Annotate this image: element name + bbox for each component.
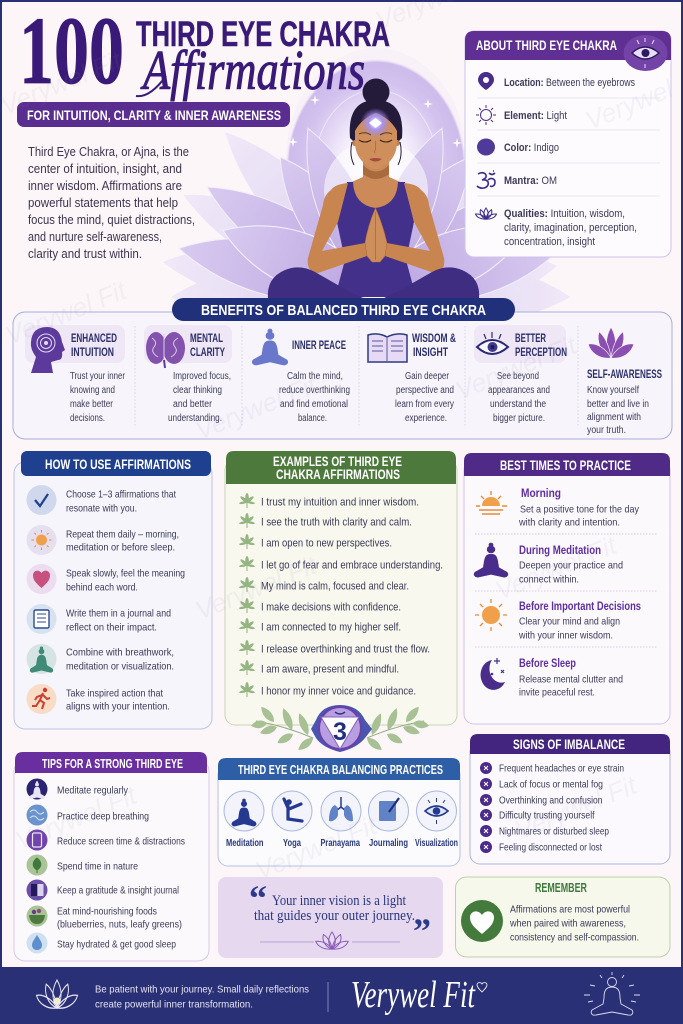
time: morning: Morning [521, 488, 561, 500]
footer message: Be patient with your journey. Small daily reflections [95, 984, 309, 996]
step: repeat: Repeat them daily – morning, [66, 528, 179, 540]
tip: hydration: Stay hydrated & get good sleep [57, 938, 176, 950]
benefit: enhanced intuition [25, 325, 126, 424]
practices header: THIRD EYE CHAKRA BALANCING PRACTICES [238, 763, 443, 777]
intro text: focus the mind, quiet distractions, [28, 213, 195, 227]
affirmation list [239, 493, 443, 698]
praying hands [365, 208, 387, 262]
panel: remember: REMEMBER [535, 881, 587, 895]
head and hair [350, 78, 402, 169]
best times header: BEST TIMES TO PRACTICE [500, 457, 631, 473]
how-to header: HOW TO USE AFFIRMATIONS [45, 456, 191, 472]
panel: balancing practices [218, 758, 460, 866]
tip: foods: (blueberries, nuts, leafy greens) [57, 918, 182, 930]
time: before sleep: Release mental clutter and [519, 674, 623, 686]
examples header [226, 451, 456, 484]
icon: footer lotus [36, 980, 78, 1008]
tip: breathing [26, 804, 149, 826]
affirmation list: I let go of fear and embrace understanding. [261, 560, 443, 572]
tip: foods: Eat mind-nourishing foods [57, 906, 157, 918]
intro text: powerful statements that help [28, 196, 178, 210]
signs list: Frequent headaches or eye strain [499, 762, 624, 774]
benefit: better perception: bigger picture. [493, 413, 545, 424]
time: before sleep: invite peaceful rest. [519, 686, 595, 698]
time: before sleep: Before Sleep [519, 658, 576, 670]
benefit: better perception: PERCEPTION [515, 347, 567, 359]
affirmation list: I see the truth with clarity and calm. [261, 516, 412, 528]
leaf wreath [250, 704, 430, 753]
benefit: enhanced intuition: knowing and [70, 385, 115, 396]
benefit: self-awareness: better and live in [587, 399, 649, 410]
benefit: wisdom and insight [368, 333, 456, 424]
tip: journal [26, 880, 179, 900]
benefit: mental clarity: and better [173, 399, 213, 410]
benefit: mental clarity: CLARITY [190, 347, 225, 359]
benefit: wisdom and insight: experience. [405, 413, 447, 424]
benefit: self-awareness: alignment with [587, 412, 641, 423]
watermarks: Verywel Fit [1, 274, 132, 351]
title: 100: 100 [19, 0, 124, 104]
benefit: enhanced intuition: ENHANCED [71, 333, 117, 345]
time: during meditation: During Meditation [519, 545, 601, 557]
time: morning [476, 488, 640, 528]
step: speak: Speak slowly, feel the meaning [66, 568, 185, 580]
practice: yoga: Yoga [283, 837, 301, 849]
practice: journaling: Journaling [369, 837, 408, 849]
tip: foods [26, 906, 182, 930]
signs header: SIGNS OF IMBALANCE [513, 737, 625, 752]
intro text [28, 145, 195, 261]
watermarks: Verywel Fit [451, 329, 582, 406]
subtitle ribbon [17, 102, 290, 127]
benefit: wisdom and insight: learn from every [395, 399, 454, 410]
about: color: Color: Indigo [504, 142, 559, 154]
step: choose: resonate with you. [66, 502, 137, 514]
footer [0, 967, 683, 1024]
title: Affirmations script: Affirmations [140, 40, 365, 102]
callout: quote: “ [249, 878, 267, 918]
affirmation list: My mind is calm, focused and clear. [261, 580, 409, 592]
intro text: center of intuition, insight, and [28, 162, 182, 176]
benefit: enhanced intuition: decisions. [70, 413, 105, 424]
time: before sleep [481, 658, 623, 698]
icon: footer meditator [584, 972, 640, 1015]
panel: remember: when paired with awareness, [509, 918, 626, 930]
time: during meditation: Deepen your practice and [519, 560, 623, 572]
watermarks: Verywel [581, 73, 678, 136]
benefit: inner peace [252, 329, 350, 424]
panel: best times to practice [464, 453, 670, 724]
benefit: better perception: BETTER [515, 333, 546, 345]
intro text: and nurture self-awareness, [28, 230, 162, 244]
icon: eye medallion [624, 35, 668, 71]
signs list: Feeling disconnected or lost [499, 842, 602, 854]
callout: quote: that guides your outer journey. [254, 908, 415, 924]
step: journal [26, 604, 171, 634]
intro text: Third Eye Chakra, or Ajna, is the [28, 145, 189, 159]
watermarks: Verywel Fit [251, 809, 382, 886]
step: combine: meditation or visualization. [66, 660, 174, 672]
benefit: wisdom and insight: perspective and [396, 385, 454, 396]
signs list: Overthinking and confusion [499, 794, 603, 806]
step: choose [26, 485, 176, 515]
woman figure [268, 78, 479, 299]
benefit: wisdom and insight: WISDOM & [412, 333, 456, 345]
title: Third Eye Chakra: THIRD EYE CHAKRA [136, 15, 390, 54]
time: before important decisions: with your inner wisdom. [518, 630, 613, 642]
watermarks: Verywel Fit [191, 549, 322, 626]
benefit: inner peace: reduce overthinking [279, 385, 350, 396]
examples header: CHAKRA AFFIRMATIONS [276, 467, 400, 482]
benefit: inner peace: and find emotional [280, 399, 348, 410]
panel: how to use affirmations [14, 451, 212, 729]
tip: reduce screen time [26, 830, 185, 850]
panel: remember: Affirmations are most powerful [510, 904, 630, 916]
examples header: EXAMPLES OF THIRD EYE [273, 454, 402, 469]
tip: meditate [26, 778, 129, 800]
about header: ABOUT THIRD EYE CHAKRA [476, 37, 617, 53]
about: mantra [477, 171, 557, 188]
benefit: self-awareness: Know yourself [587, 385, 639, 396]
icon: heart in circle [461, 900, 503, 942]
tip: nature: Spend time in nature [57, 860, 138, 872]
practice: pranayama [320, 791, 361, 849]
tips header [15, 752, 207, 773]
tips header: TIPS FOR A STRONG THIRD EYE [42, 756, 183, 771]
signs list: Lack of focus or mental fog [499, 778, 603, 790]
how-to header [21, 451, 211, 476]
watermarks: Verywel Fit [491, 529, 622, 606]
step: journal: Write them in a journal and [66, 608, 171, 620]
benefit: self-awareness [587, 327, 662, 436]
benefit: mental clarity: understanding. [168, 413, 222, 424]
callout: quote: ” [413, 911, 431, 951]
benefit: better perception: understand the [490, 399, 546, 410]
panel: signs of imbalance [470, 734, 670, 864]
about: location: Location: Between the eyebrows [504, 77, 635, 89]
panel: tips for a strong third eye [14, 752, 209, 961]
benefit: better perception [474, 325, 567, 424]
panel: remember [456, 877, 670, 957]
tip: breathing: Practice deep breathing [57, 810, 149, 822]
practice: yoga [272, 791, 312, 849]
practice: meditation: Meditation [226, 837, 264, 849]
time: during meditation: connect within. [519, 574, 579, 586]
benefit: wisdom and insight: INSIGHT [413, 347, 448, 359]
panel: benefits [13, 298, 672, 439]
time: before important decisions: Before Important Decisions [519, 601, 641, 613]
about: color [477, 138, 559, 156]
practice: visualization: Visualization [415, 837, 458, 849]
halo and lotus petals behind figure [159, 48, 579, 326]
brand logo: Verywel Fit [351, 974, 476, 1016]
about: qualities [476, 208, 637, 248]
best times header [464, 453, 670, 476]
affirmation list: I am connected to my higher self. [261, 622, 401, 634]
tip: reduce screen time: Reduce screen time & distractions [57, 836, 185, 848]
about header [465, 31, 671, 60]
callout: quote [218, 877, 443, 958]
benefit: inner peace: Calm the mind, [287, 371, 343, 382]
signs list: Nightmares or disturbed sleep [499, 826, 609, 838]
tip: nature [26, 854, 138, 876]
step: combine [26, 644, 174, 674]
subtitle ribbon: FOR INTUITION, CLARITY & INNER AWARENESS [27, 107, 281, 123]
about: qualities: concentration, insight [504, 236, 595, 248]
benefit: enhanced intuition: make better [70, 399, 114, 410]
benefit: inner peace: INNER PEACE [292, 340, 346, 352]
about: location [478, 72, 635, 90]
affirmation list: I honor my inner voice and guidance. [261, 686, 416, 698]
practices header [218, 758, 460, 780]
step: speak: behind each word. [66, 582, 138, 594]
step: take action: Take inspired action that [66, 688, 163, 700]
about: qualities: Qualities: Intuition, wisdom, [504, 208, 625, 220]
watermarks: Verywel Fit [511, 769, 642, 846]
footer message [95, 984, 309, 1010]
benefits banner: BENEFITS OF BALANCED THIRD EYE CHAKRA [201, 302, 486, 319]
arms [308, 183, 444, 273]
about: element: Element: Light [504, 110, 567, 122]
emblem: third eye chakra with leaves: 3 [333, 718, 347, 746]
practice: visualization [415, 791, 458, 849]
benefit: self-awareness: your truth. [587, 425, 626, 436]
step: take action: aligns with your intention. [66, 700, 170, 712]
crossed legs [268, 267, 479, 299]
benefit: enhanced intuition: INTUITION [71, 347, 114, 359]
signs list [480, 762, 624, 854]
tank and chest [335, 160, 416, 297]
footer message: create powerful inner transformation. [95, 998, 253, 1010]
practice: pranayama: Pranayama [320, 837, 360, 849]
panel: about third eye chakra [465, 31, 671, 257]
time: morning: with clarity and intention. [518, 516, 620, 528]
benefit: mental clarity: clear thinking [173, 385, 222, 396]
tip: hydration [26, 932, 176, 954]
step: journal: reflect on their impact. [66, 622, 157, 634]
about: mantra: Mantra: OM [504, 175, 557, 187]
callout: quote: Your inner vision is a light [272, 893, 406, 909]
step: take action [26, 684, 170, 714]
panel: remember: consistency and self-compassion. [510, 932, 639, 944]
practice: meditation [224, 791, 264, 849]
time: during meditation [474, 543, 623, 586]
tip: meditate: Meditate regularly [57, 784, 129, 796]
watermarks: Verywel Fit [191, 369, 322, 446]
step: speak [26, 564, 185, 594]
intro text: clarity and trust within. [28, 247, 142, 261]
time: morning: Set a positive tone for the day [520, 504, 640, 516]
about: qualities: clarity, imagination, perception, [504, 222, 637, 234]
benefit: mental clarity: MENTAL [190, 333, 223, 345]
step: combine: Combine with breathwork, [66, 646, 174, 658]
affirmation list: I am aware, present and mindful. [261, 664, 399, 676]
about: element [476, 105, 567, 125]
benefit: mental clarity [144, 325, 232, 424]
benefit: enhanced intuition: Trust your inner [70, 371, 126, 382]
step: repeat: meditation or before sleep. [66, 542, 175, 554]
affirmation list: I make decisions with confidence. [261, 602, 401, 614]
benefit: inner peace: balance. [298, 413, 327, 424]
benefits banner [172, 298, 515, 321]
intro text: inner wisdom. Affirmations are [28, 179, 182, 193]
time: before important decisions: Clear your mind and align [519, 616, 620, 628]
step: repeat [26, 525, 179, 555]
time: before important decisions [475, 599, 641, 642]
step: choose: Choose 1–3 affirmations that [66, 488, 176, 500]
signs list: Difficulty trusting yourself [499, 810, 595, 822]
benefit: better perception: See beyond [497, 371, 539, 382]
affirmation list: I trust my intuition and inner wisdom. [261, 496, 419, 508]
watermarks: Verywel Fit [11, 779, 142, 856]
affirmation list: I am open to new perspectives. [261, 538, 392, 550]
tip: journal: Keep a gratitude & insight journal [57, 884, 179, 896]
signs header [470, 734, 670, 754]
benefit: mental clarity: Improved focus, [173, 371, 231, 382]
benefit: wisdom and insight: Gain deeper [405, 371, 450, 382]
practice: journaling [368, 791, 408, 849]
emblem: third eye chakra with leaves [250, 704, 430, 753]
affirmation list: I release overthinking and trust the flow. [261, 644, 430, 656]
illustration: meditating woman with lotus [159, 48, 579, 326]
panel: examples of affirmations [225, 451, 457, 725]
benefit: better perception: appearances and [488, 385, 550, 396]
